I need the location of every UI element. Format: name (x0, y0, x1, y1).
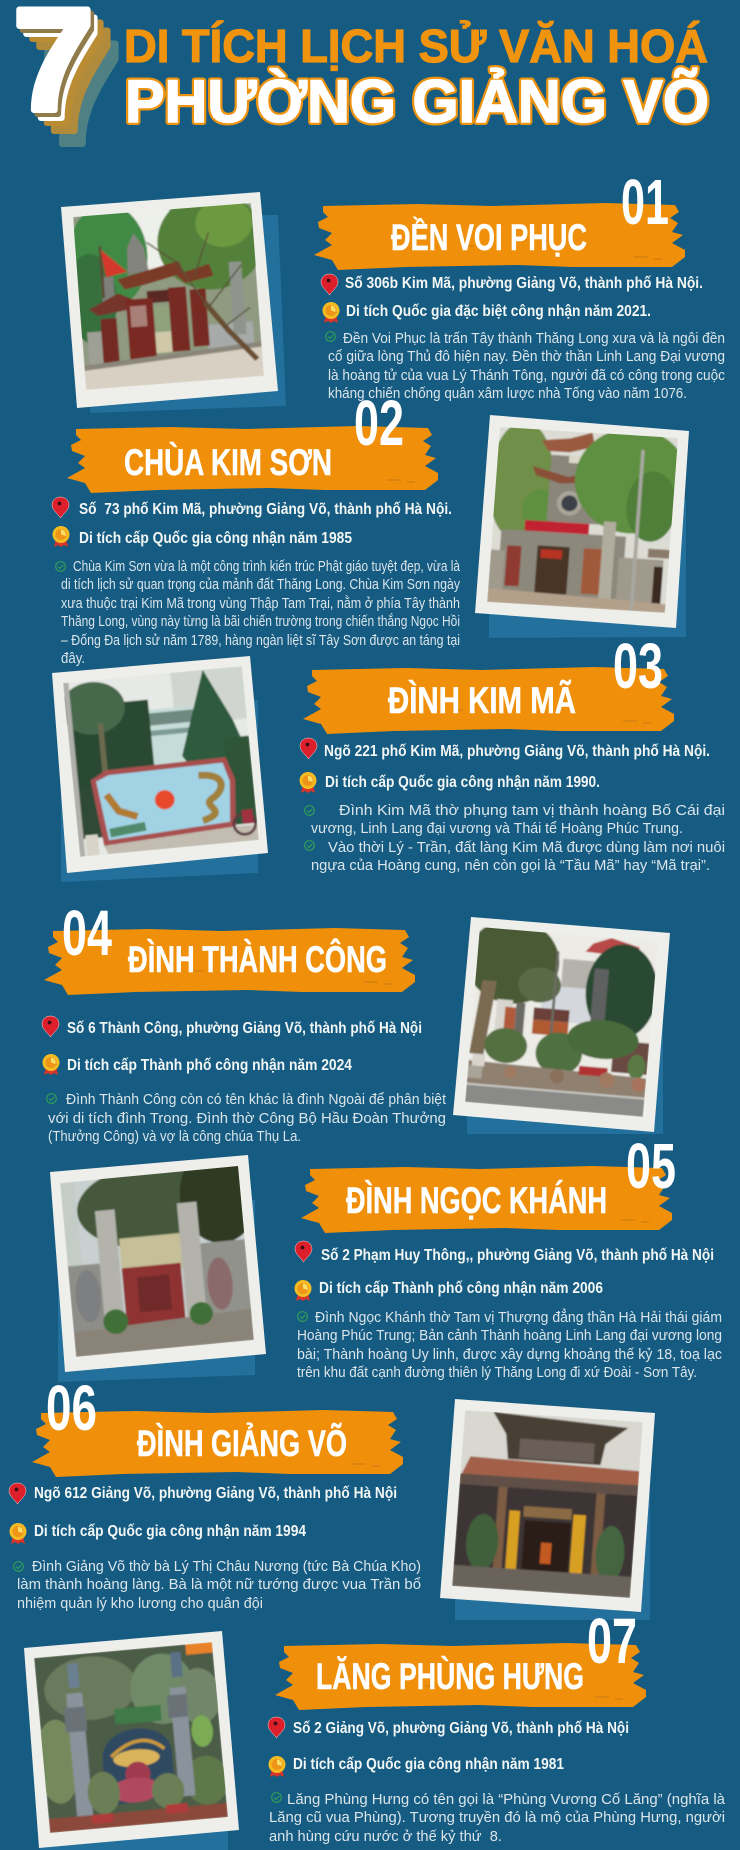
address 2 (52, 497, 452, 518)
ranking 5 (294, 1280, 603, 1301)
banner 7 (275, 1643, 646, 1710)
section 07: Lăng Phùng Hưng (24, 1605, 726, 1850)
description 5: bài; Thành hoàng Uy linh, được xây dựng khoảng thế kỷ 18, toạ lạc (297, 1346, 722, 1363)
heading 2: CHÙA KIM SƠN (124, 441, 332, 483)
banner 5 (301, 1166, 672, 1233)
description 7: Lăng Phùng Hưng có tên gọi là “Phùng Vương Cố Lăng” (nghĩa là (287, 1791, 726, 1808)
address 6 (9, 1483, 397, 1504)
photo 7 (24, 1631, 239, 1850)
ranking 3 (300, 772, 600, 793)
address 4: Số 6 Thành Công, phường Giảng Võ, thành phố Hà Nội (67, 1020, 422, 1037)
photo 2 (475, 415, 693, 638)
ranking 6: Di tích cấp Quốc gia công nhận năm 1994 (34, 1523, 306, 1540)
ranking 6 (10, 1523, 306, 1544)
address 5 (295, 1241, 714, 1264)
description 3 (305, 802, 725, 874)
description 2: Thăng Long, vùng này từng là bãi chiến trường trong chiến thắng Ngọc Hồi (61, 613, 460, 630)
description 2: – Đống Đa lịch sử năm 1789, hàng ngàn liệt sĩ Tây Sơn được an táng tại (61, 632, 460, 649)
heading 6: ĐÌNH GIẢNG VÕ (137, 1422, 347, 1464)
numeral 7 with layered shadows (13, 0, 122, 175)
banner 3 (303, 667, 674, 734)
description 4 (47, 1091, 447, 1145)
description 4: Đình Thành Công còn có tên khác là đình Ngoài để phân biệt (66, 1091, 447, 1108)
description 5: trên khu đất cạnh đường thiên lý Thăng Long đi xứ Đoài - Sơn Tây. (297, 1364, 697, 1381)
photo 3 (52, 656, 268, 882)
title line 1: DI TÍCH LỊCH SỬ VĂN HOÁ (124, 20, 708, 72)
description 6: nhiệm quản lý kho lương cho quân đội (17, 1595, 263, 1612)
section 02: Chùa Kim Sơn (52, 387, 693, 667)
description 5 (297, 1308, 722, 1381)
description 6: làm thành hoàng làng. Bà là một nữ tướng được vua Trần bổ (17, 1576, 421, 1593)
description 7: Lăng cũ vua Phùng). Tương truyền đó là mộ của Phùng Hưng, người (269, 1809, 725, 1826)
ranking 1: Di tích Quốc gia đặc biệt công nhận năm 2021. (346, 303, 651, 320)
number 03: 03 (613, 630, 663, 702)
description 2: di tích lịch sử quan trọng của mảnh đất Thăng Long. Chùa Kim Sơn ngày (61, 576, 460, 593)
description 7 (269, 1791, 726, 1845)
description 3: Vào thời Lý - Trần, đất làng Kim Mã được dùng làm nơi nuôi (328, 839, 725, 856)
address 4 (42, 1016, 422, 1037)
photo 6 (440, 1399, 655, 1620)
address 6: Ngõ 612 Giảng Võ, phường Giảng Võ, thành phố Hà Nội (34, 1485, 397, 1502)
description 4: (Thưởng Công) và vợ là công chúa Thụ La. (48, 1128, 301, 1145)
description 1 (326, 330, 725, 402)
title line 2: PHƯỜNG GIẢNG VÕ (125, 68, 709, 135)
numeral 7 with layered shadows: 7 (33, 0, 114, 162)
section 04: Đình Thành Công (42, 897, 670, 1145)
banner 1 (314, 203, 685, 270)
number 02: 02 (354, 387, 404, 459)
description 1: kháng chiến chống quân xâm lược nhà Tống vào năm 1076. (328, 385, 687, 402)
banner 6 (32, 1410, 403, 1477)
banner 2 (67, 426, 438, 493)
photo 1 (60, 188, 286, 413)
description 2 (56, 558, 461, 667)
section 01: Đền Voi Phục (60, 166, 725, 413)
ranking 4: Di tích cấp Thành phố công nhận năm 2024 (67, 1057, 352, 1074)
heading 4: ĐÌNH THÀNH CÔNG (128, 938, 387, 980)
numeral 7 with layered shadows: 7 (41, 12, 122, 175)
description 7: anh hùng cứu nước ở thế kỷ thứ 8. (269, 1828, 502, 1845)
heading 1: ĐỀN VOI PHỤC (391, 217, 587, 258)
banner 4 (44, 928, 415, 995)
title line 2: PHƯỜNG GIẢNG VÕ (125, 68, 709, 135)
ranking 2: Di tích cấp Quốc gia công nhận năm 1985 (79, 530, 352, 547)
ranking 5: Di tích cấp Thành phố công nhận năm 2006 (319, 1280, 603, 1297)
heading 3: ĐÌNH KIM MÃ (388, 679, 576, 721)
ranking 2 (52, 526, 352, 547)
address 1: Số 306b Kim Mã, phường Giảng Võ, thành phố Hà Nội. (345, 275, 703, 292)
description 3: ngựa của Hoàng cung, nên còn gọi là “Tầu Mã” hay “Mã trại”. (311, 857, 710, 874)
photo 4 (453, 916, 670, 1134)
description 5: Đình Ngọc Khánh thờ Tam vị Thượng đẳng thần Hà Hải thái giám (315, 1308, 722, 1326)
heading 7: LĂNG PHÙNG HƯNG (316, 1655, 584, 1697)
number 05: 05 (626, 1130, 676, 1202)
section 05: Đình Ngọc Khánh (50, 1130, 722, 1382)
description 2: xưa thuộc trại Kim Mã trong vùng Thập Tam Trại, nằm ở phía Tây thành (61, 595, 460, 612)
description 3: vương, Linh Lang đại vương và Thái tể Hoàng Phúc Trung. (311, 820, 683, 837)
heading 5: ĐÌNH NGỌC KHÁNH (346, 1180, 607, 1221)
ranking 7: Di tích cấp Quốc gia công nhận năm 1981 (293, 1756, 564, 1773)
description 2: Chùa Kim Sơn vừa là một công trình kiến trúc Phật giáo tuyệt đẹp, vừa là (73, 558, 461, 575)
description 4: với di tích đình Trong. Đình thờ Công Bộ Hầu Đoàn Thưởng (48, 1110, 446, 1127)
ranking 1 (322, 302, 651, 323)
description 2: đây. (61, 650, 85, 667)
ranking 3: Di tích cấp Quốc gia công nhận năm 1990. (325, 774, 600, 791)
address 7: Số 2 Giảng Võ, phường Giảng Võ, thành phố Hà Nội (293, 1720, 629, 1737)
address 3 (300, 738, 710, 760)
ranking 7 (268, 1756, 564, 1777)
number 06: 06 (46, 1372, 97, 1444)
number 07: 07 (587, 1605, 637, 1677)
description 3: Đình Kim Mã thờ phụng tam vị thành hoàng Bố Cái đại (339, 802, 725, 819)
section 03: Đình Kim Mã (52, 630, 725, 882)
address 2: Số 73 phố Kim Mã, phường Giảng Võ, thành phố Hà Nội. (79, 501, 452, 518)
photo 5 (50, 1142, 272, 1382)
address 7 (268, 1717, 629, 1738)
number 04: 04 (62, 897, 112, 969)
description 6 (14, 1558, 421, 1612)
description 6: Đình Giảng Võ thờ bà Lý Thị Châu Nương (tức Bà Chúa Kho) (32, 1558, 421, 1575)
section 06: Đình Giảng Võ (9, 1372, 655, 1620)
ranking 4 (42, 1054, 352, 1075)
number 01: 01 (621, 166, 669, 238)
